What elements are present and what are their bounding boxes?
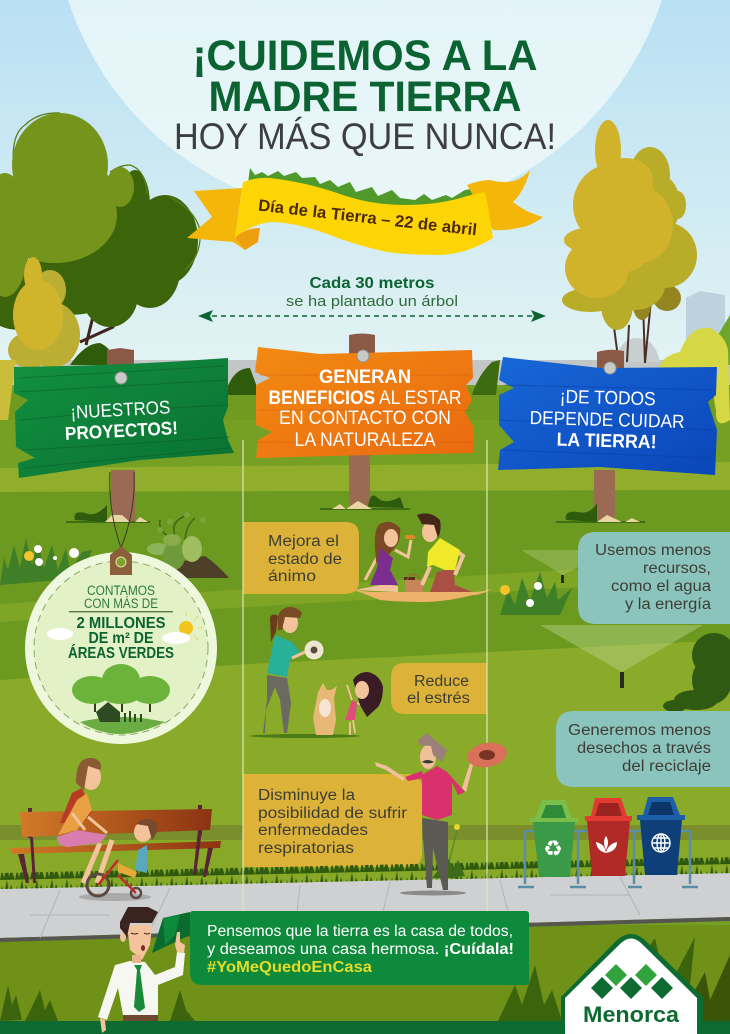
badge caption: CONTAMOS	[87, 583, 155, 598]
ribbon banner: Día de la Tierra – 22 de abril	[257, 197, 478, 239]
bench with mother	[10, 758, 221, 883]
badge headline: ÁREAS VERDES	[68, 645, 174, 662]
callout: resources: recursos,	[643, 560, 711, 577]
distance arrow	[198, 310, 546, 322]
recycling bins	[518, 797, 698, 887]
callout: respiratory	[243, 774, 422, 867]
bush: right small	[660, 315, 730, 423]
callout: mood: ánimo	[268, 568, 316, 585]
pale circle behind the title	[53, 0, 677, 216]
callout: resources	[578, 532, 730, 624]
callout: respiratory: Disminuye la	[258, 787, 355, 804]
bush right	[663, 633, 730, 712]
bottom green strip	[0, 1021, 730, 1034]
distant grey road and buildings	[0, 291, 730, 394]
woman with ball	[250, 607, 360, 738]
callout: recycling: desechos a través	[577, 740, 711, 757]
icon: sun and clouds	[47, 612, 202, 644]
badge headline	[68, 615, 174, 662]
icon: leaves	[596, 836, 617, 853]
sign text: ¡NUESTROS	[70, 396, 171, 423]
title: ¡CUIDEMOS A LA	[192, 32, 538, 80]
callout: resources: y la energía	[625, 596, 711, 613]
tree: right yellow	[562, 120, 697, 363]
sky background	[0, 0, 730, 400]
callout: closing message: #YoMeQuedoEnCasa	[207, 959, 372, 976]
logo mark	[591, 964, 673, 999]
callout: recycling: Generemos menos	[568, 722, 711, 739]
sign text: LA TIERRA!	[556, 430, 657, 453]
flowers behind old man	[430, 824, 465, 878]
distance caption: Cada 30 metros	[310, 275, 434, 292]
sign text: EN CONTACTO CON	[279, 408, 451, 429]
callout: recycling	[556, 711, 730, 787]
red bin	[585, 798, 632, 876]
sign text: PROYECTOS!	[64, 417, 178, 444]
dog	[313, 683, 337, 735]
grass tufts foreground	[0, 937, 730, 1021]
callout: stress: el estrés	[407, 690, 470, 707]
sign text: ¡DE TODOS	[559, 387, 656, 410]
sidewalk	[0, 873, 730, 942]
sign text: GENERAN	[319, 367, 411, 388]
callout: closing message: Pensemos que la tierra es la casa de todos,	[207, 923, 513, 940]
callout: mood: estado de	[268, 551, 342, 568]
callout: stress: Reduce	[414, 673, 469, 690]
badge headline: DE m² DE	[88, 630, 154, 647]
ribbon banner	[187, 168, 543, 255]
green bin	[530, 800, 578, 877]
logo: Menorca: Menorca	[583, 1002, 680, 1027]
callout: respiratory: respiratorias	[258, 840, 354, 857]
tree: left small yellow	[0, 257, 80, 420]
tree: left large	[0, 113, 200, 365]
callout: stress	[391, 663, 487, 714]
sign posts	[66, 334, 645, 522]
grass along walkway	[0, 857, 730, 889]
mother	[57, 758, 112, 883]
callout: closing message	[190, 911, 529, 985]
sprinklers	[521, 550, 703, 688]
callout: resources: como el agua	[611, 578, 711, 595]
bush: behind signs	[225, 360, 500, 395]
panel: green sign	[14, 358, 234, 478]
distance caption	[286, 275, 458, 310]
old man with hat	[375, 733, 509, 896]
flowers right	[500, 572, 572, 615]
vertical column lines	[243, 440, 487, 912]
callout: mood	[243, 522, 359, 594]
icon: globe	[652, 834, 670, 852]
plant	[147, 512, 229, 578]
flowers left	[0, 538, 92, 585]
dog and girl	[313, 672, 383, 735]
distance caption: se ha plantado un árbol	[286, 293, 458, 310]
screw	[357, 350, 369, 362]
callout: mood: Mejora el	[268, 533, 339, 550]
screw	[115, 372, 127, 384]
badge caption	[69, 583, 173, 612]
callout: closing message: y deseamos una casa hermosa. ¡Cuídala!	[207, 941, 514, 958]
logo: Menorca	[561, 934, 703, 1034]
callout: recycling: del reciclaje	[622, 758, 711, 775]
title: HOY MÁS QUE NUNCA!	[174, 116, 556, 157]
lower lawn	[0, 925, 730, 1025]
woman	[355, 522, 415, 592]
panel: blue sign	[498, 357, 717, 475]
sign text: LA NATURALEZA	[294, 430, 436, 451]
title	[174, 32, 556, 157]
callout: resources: Usemos menos	[595, 542, 711, 559]
couple picnic	[348, 513, 493, 602]
title: MADRE TIERRA	[208, 73, 522, 121]
sign text	[268, 367, 462, 451]
hang tag	[110, 546, 132, 575]
man	[417, 513, 472, 592]
sign text: BENEFICIOS AL ESTAR	[268, 388, 462, 409]
callout: respiratory: enfermedades	[258, 822, 368, 839]
icon: trees and house	[72, 664, 170, 734]
megaphone	[152, 912, 190, 953]
badge caption: CON MÁS DE	[84, 596, 158, 611]
picnic basket	[404, 574, 423, 592]
sign text: DEPENDE CUIDAR	[529, 408, 685, 433]
blue bin	[637, 797, 685, 875]
callout: respiratory: posibilidad de sufrir	[258, 805, 407, 822]
man with megaphone	[98, 907, 190, 1033]
panel: orange sign	[255, 347, 474, 458]
sign text	[63, 396, 178, 444]
grass ground	[0, 385, 730, 945]
screw	[604, 362, 616, 374]
badge headline: 2 MILLONES	[76, 615, 166, 632]
child on tricycle	[79, 819, 157, 901]
sign text	[529, 386, 685, 454]
circle badge: green areas	[25, 472, 217, 744]
icon: recycle: ♻	[543, 836, 563, 861]
girl	[345, 672, 383, 735]
